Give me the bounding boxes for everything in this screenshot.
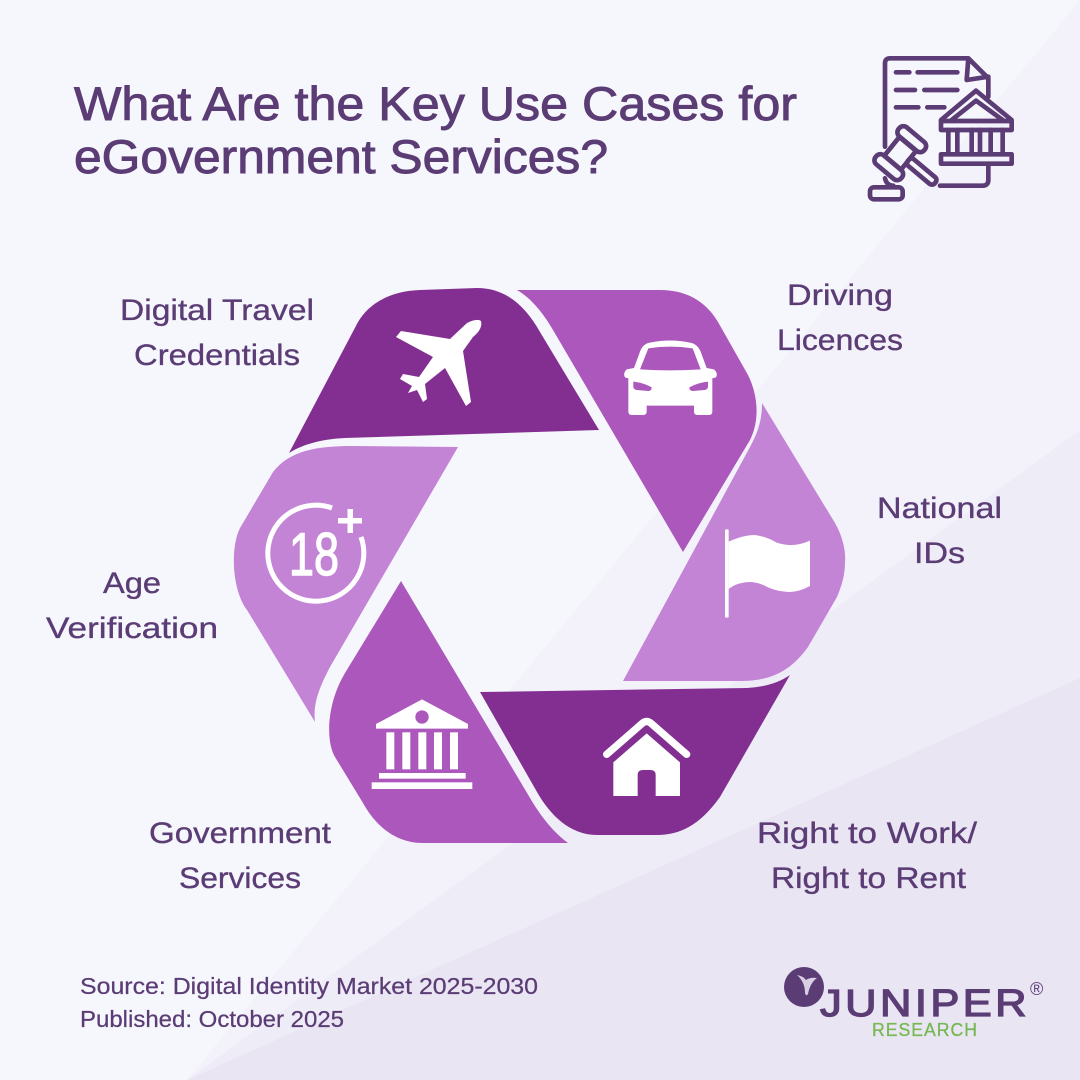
label: national ids: IDs [914, 537, 965, 570]
label: driving licences [777, 279, 903, 357]
source note: Source: Digital Identity Market 2025-2030 [80, 973, 538, 999]
icon: house [607, 721, 687, 796]
label: government services: Services [179, 862, 301, 895]
logo: juniper research [784, 967, 1043, 1040]
source note [80, 973, 538, 1032]
logo: juniper research: JUNIPER [820, 983, 1030, 1025]
title [74, 77, 797, 183]
logo: juniper research: RESEARCH [872, 1020, 978, 1040]
label: right to work and rent: Right to Rent [771, 862, 967, 895]
label: driving licences: Licences [777, 324, 903, 357]
label: age verification [46, 567, 218, 645]
logo: juniper research: ® [1030, 979, 1043, 999]
label: government services: Government [149, 817, 332, 850]
segment: right to work and rent [480, 675, 790, 835]
icon: government building [372, 699, 472, 789]
label: age verification: Age [103, 567, 161, 600]
icon: document, courthouse and gavel [870, 58, 1012, 199]
segment: age verification [234, 446, 458, 722]
icon: 18 plus [268, 505, 364, 601]
label: right to work and rent: Right to Work/ [757, 817, 978, 850]
title: eGovernment Services? [74, 130, 608, 183]
label: digital travel credentials: Credentials [134, 339, 300, 372]
label: driving licences: Driving [787, 279, 893, 312]
segment: government services [329, 581, 568, 843]
label: digital travel credentials: Digital Travel [120, 294, 314, 327]
label: age verification: Verification [46, 612, 218, 645]
label: government services [149, 817, 332, 895]
label: national ids [877, 492, 1002, 570]
icon: airplane [396, 320, 481, 406]
label: right to work and rent [757, 817, 978, 895]
label: digital travel credentials [120, 294, 314, 372]
icon: car [624, 340, 717, 415]
icon: flag [725, 529, 810, 618]
label: national ids: National [877, 492, 1002, 525]
title: What Are the Key Use Cases for [74, 77, 797, 130]
segment: driving licences [517, 290, 757, 552]
segment: digital travel credentials [289, 288, 599, 453]
icon: 18 plus: 18 [289, 521, 339, 588]
segment: national ids [623, 403, 845, 681]
source note: Published: October 2025 [80, 1006, 344, 1032]
